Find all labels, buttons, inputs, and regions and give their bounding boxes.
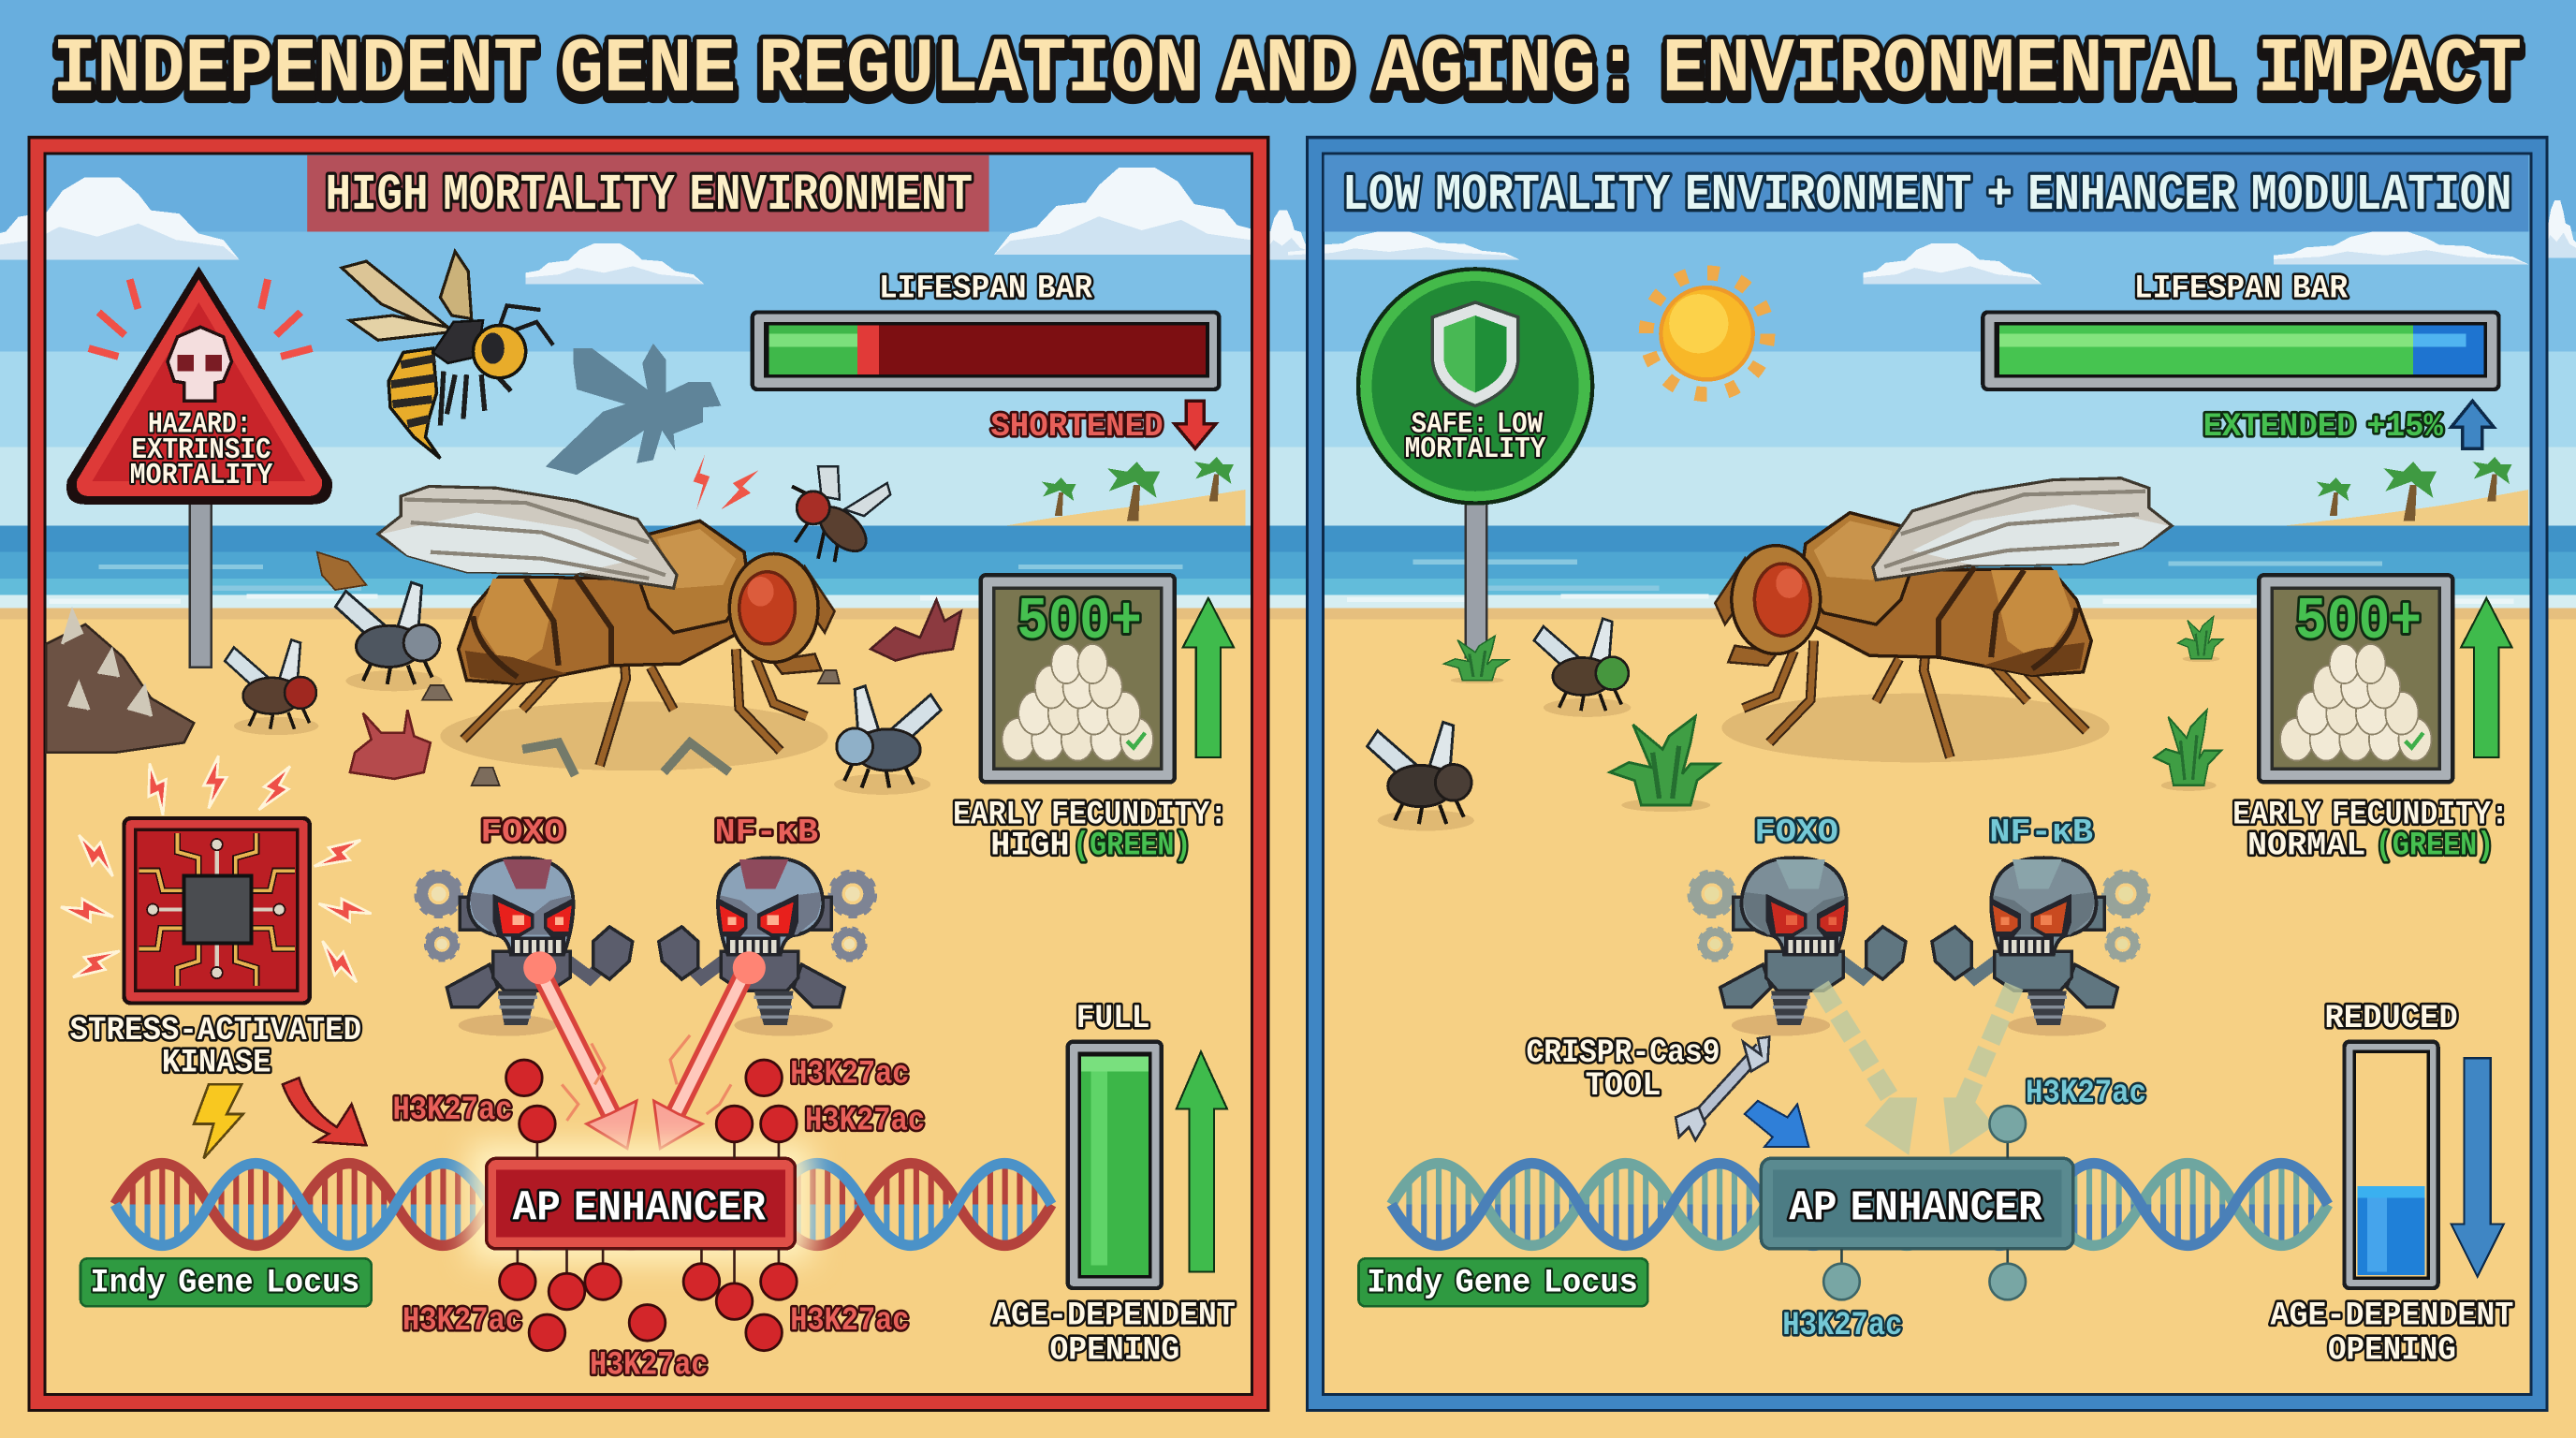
small flies and debris	[46, 455, 961, 795]
label: NF-kB: NF-κB	[714, 814, 818, 852]
lifespan bar: shortened	[753, 271, 1219, 448]
labels: H3K27ac red: H3K27ac	[790, 1056, 909, 1093]
label: early fecundity: HIGH	[990, 828, 1070, 865]
icon: wrench	[1676, 1036, 1769, 1140]
egg count: 500+	[1017, 588, 1142, 655]
gauge: age-dependent opening full	[992, 1000, 1236, 1369]
labels: H3K27ac teal: H3K27ac	[2026, 1075, 2146, 1112]
robot: NF-kB active	[659, 858, 874, 1036]
sign text: hazard: MORTALITY	[130, 460, 272, 492]
egg count panel: early fecundity	[981, 575, 1234, 782]
lifespan bar: extended	[1983, 271, 2499, 448]
label: early fecundity: EARLY FECUNDITY:	[2232, 796, 2509, 833]
small fly: blue	[834, 686, 941, 795]
gauge: age-dependent opening full: OPENING	[1050, 1331, 1179, 1369]
arrow: opening up	[1177, 1051, 1227, 1271]
icon: safe shield sign	[1356, 267, 1594, 683]
gauge: age-dependent opening reduced: AGE-DEPENDENT	[2271, 1298, 2513, 1335]
sign text: hazard	[130, 409, 272, 492]
label: indy gene locus: Indy Gene Locus	[1367, 1265, 1638, 1302]
label: stress-activated kinase: KINASE	[162, 1044, 271, 1081]
labels: H3K27ac teal	[1782, 1075, 2146, 1344]
icon: lightning bolt	[194, 1084, 243, 1158]
sign text: hazard: EXTRINSIC	[131, 434, 271, 467]
small pebbles	[422, 670, 840, 785]
small fly: grey	[335, 582, 443, 691]
arrow: lifespan down	[1175, 401, 1216, 448]
labels: H3K27ac teal: H3K27ac	[1782, 1307, 1902, 1344]
DNA helix: indy gene locus	[1392, 1164, 2328, 1245]
panel: high mortality environment	[37, 145, 1260, 1402]
sign text: safe: SAFE: LOW	[1412, 409, 1543, 442]
arrow: wrench to enhancer	[1745, 1101, 1808, 1147]
icon: stress-activated kinase chip	[61, 756, 372, 1003]
small fly: dark	[1368, 722, 1474, 830]
panel frame: red	[37, 145, 1260, 1402]
arrow: lifespan up	[2452, 401, 2494, 448]
label: early fecundity: (GREEN)	[1073, 828, 1191, 865]
sign text: hazard: HAZARD:	[148, 409, 252, 442]
label: CRISPR-Cas9 tool	[1526, 1034, 1720, 1105]
icon: sun	[1647, 272, 1767, 394]
label: NF-kB: NF-κB	[1989, 814, 2093, 852]
red blob	[350, 710, 431, 779]
lifespan bar: extended: LIFESPAN BAR	[2134, 271, 2349, 308]
island with palm trees	[1005, 457, 1245, 526]
heading: high mortality environment: HIGH MORTALITY ENVIRONMENT	[326, 168, 973, 225]
small flies and plants	[1368, 616, 2223, 830]
lightning marks	[694, 455, 759, 509]
lifespan bar: shortened: SHORTENED	[990, 408, 1164, 446]
ground debris	[522, 742, 729, 775]
leaf debris	[317, 552, 366, 590]
lifespan bar: extended: EXTENDED +15%	[2203, 408, 2444, 446]
label: early fecundity: EARLY FECUNDITY:	[953, 796, 1227, 833]
energy sparks	[61, 756, 372, 989]
AP enhancer: open	[470, 1144, 812, 1262]
heading: high mortality environment	[307, 155, 989, 231]
crab	[871, 600, 961, 661]
plant: right grass	[2154, 710, 2221, 791]
labels: H3K27ac red: H3K27ac	[805, 1103, 925, 1140]
title: INDEPENDENT GENE REGULATION AND AGING: ENVIRONMENTAL IMPACT	[52, 33, 2522, 121]
robot: NF-kB muted	[1932, 858, 2147, 1036]
small fly: green eye	[1534, 619, 1631, 717]
lifespan bar: shortened: LIFESPAN BAR	[879, 271, 1093, 308]
label: CRISPR-Cas9 tool: TOOL	[1586, 1067, 1661, 1105]
arrows: faded dashed signals	[1821, 986, 2014, 1155]
gauge: age-dependent opening reduced	[2271, 1000, 2513, 1369]
histone marks: teal H3K27ac beads	[1823, 1106, 2026, 1299]
labels: H3K27ac red: H3K27ac	[590, 1346, 708, 1384]
label: indy gene locus: Indy Gene Locus	[91, 1265, 359, 1302]
AP enhancer: closed	[1761, 1158, 2073, 1249]
clouds	[0, 168, 2576, 285]
label: FOXO: FOXO	[1754, 814, 1838, 852]
DNA helix: indy gene locus	[115, 1164, 1051, 1245]
gauge: age-dependent opening full: AGE-DEPENDENT	[992, 1298, 1236, 1335]
label: stress-activated kinase	[70, 1012, 361, 1081]
icon: skull	[168, 327, 231, 401]
small fly: dark	[225, 639, 318, 735]
arrow: fecundity up	[1183, 598, 1234, 757]
label: CRISPR-Cas9 tool: CRISPR-Cas9	[1526, 1034, 1720, 1072]
AP enhancer: open: AP ENHANCER	[513, 1183, 766, 1232]
icon: big fly	[1715, 478, 2172, 762]
labels: H3K27ac red: H3K27ac	[790, 1302, 909, 1340]
gauge: age-dependent opening full: FULL	[1076, 1000, 1150, 1037]
island with palm trees	[2284, 457, 2528, 526]
small fly: wounded flying	[792, 466, 890, 562]
label: early fecundity	[953, 796, 1227, 865]
AP enhancer: closed: AP ENHANCER	[1789, 1183, 2042, 1232]
gauge: age-dependent opening reduced: OPENING	[2328, 1331, 2456, 1369]
panel frame: blue	[1315, 145, 2539, 1402]
robot: FOXO muted	[1690, 858, 1906, 1036]
plant: central grass	[1610, 716, 1719, 812]
arrow: kinase to enhancer	[283, 1078, 366, 1145]
plant: small grass	[2177, 616, 2223, 662]
arrows: active laser beams	[523, 951, 766, 1149]
label: early fecundity: NORMAL	[2247, 828, 2365, 865]
label: early fecundity	[2232, 796, 2509, 865]
gauge: age-dependent opening reduced: REDUCED	[2324, 1000, 2458, 1037]
label: early fecundity: (GREEN)	[2376, 828, 2494, 865]
histone marks: red H3K27ac beads	[500, 1060, 797, 1351]
danger rays	[89, 279, 312, 357]
egg count panel: early fecundity	[2259, 575, 2512, 782]
icon: shield	[1432, 302, 1518, 406]
sign text: safe: MORTALITY	[1405, 433, 1546, 466]
labels: H3K27ac red: H3K27ac	[392, 1092, 513, 1129]
egg count: 500+	[2295, 588, 2422, 655]
label: stress-activated kinase: STRESS-ACTIVATED	[70, 1012, 361, 1049]
icon: wasp	[342, 252, 553, 459]
panel: low mortality environment + enhancer modulation	[1315, 145, 2539, 1402]
icon: big fly	[378, 487, 835, 770]
robot: FOXO active	[417, 858, 633, 1036]
icon: wasp shadow	[546, 344, 721, 475]
icon: hazard triangle sign	[66, 266, 332, 668]
title: INDEPENDENT GENE REGULATION AND AGING: ENVIRONMENTAL IMPACT	[52, 26, 2522, 114]
labels: H3K27ac red: H3K27ac	[402, 1302, 522, 1340]
arrow: fecundity up	[2461, 598, 2512, 757]
arrow: opening down	[2452, 1058, 2504, 1277]
label: FOXO: FOXO	[480, 814, 565, 852]
sign text: safe	[1405, 409, 1546, 466]
spiky rock heap	[46, 624, 194, 753]
labels: H3K27ac red	[392, 1056, 925, 1384]
